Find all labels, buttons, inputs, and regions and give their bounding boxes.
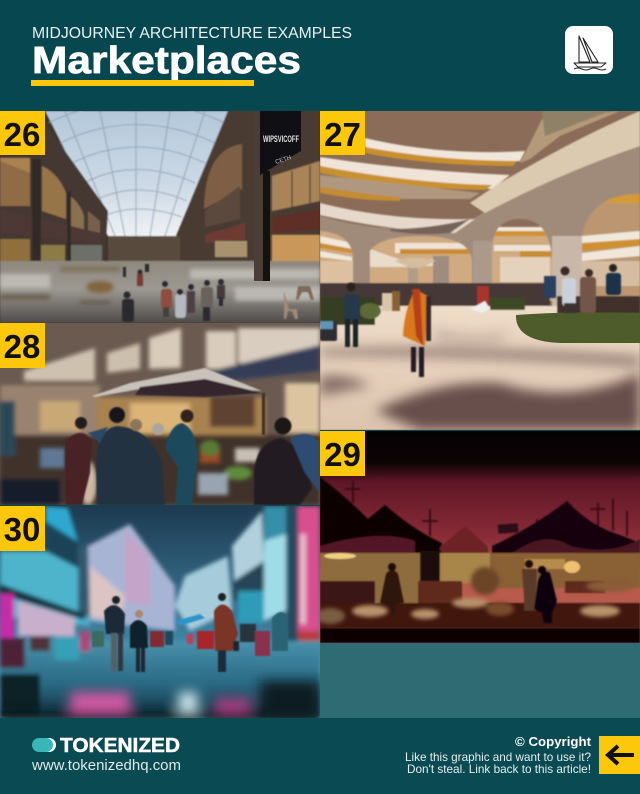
stall canopy [92, 368, 265, 435]
number badge 26 [0, 111, 45, 155]
header background [0, 0, 640, 111]
shoppers and bags [92, 593, 288, 672]
number badge 26: 26 [4, 116, 40, 153]
icon: Midjourney sailboat logo [565, 26, 613, 74]
people [320, 264, 621, 377]
upper levels [365, 138, 525, 162]
number badge 27: 27 [324, 116, 361, 153]
number badge 27 [320, 111, 365, 155]
image: marketplace 29, night bazaar [320, 431, 640, 643]
shoppers [65, 407, 320, 505]
header subtitle: MIDJOURNEY ARCHITECTURE EXAMPLES [32, 25, 352, 42]
produce [40, 440, 260, 505]
copyright note: Like this graphic and want to use it? [405, 750, 591, 764]
number badge 28: 28 [4, 328, 40, 365]
arch structure [320, 143, 640, 306]
image: marketplace 30, neon shopping street [0, 506, 320, 718]
sign: WIPSVICOFF [263, 134, 299, 144]
blurred foreground lights [0, 681, 320, 722]
copyright note: © Copyright [515, 734, 592, 749]
arrow box [599, 736, 640, 774]
number badge 28 [0, 323, 45, 368]
footer background [0, 718, 640, 794]
number badge 30: 30 [4, 511, 40, 548]
sign: CETH [275, 155, 292, 166]
image: marketplace 28, indoor food market [0, 323, 320, 505]
silhouettes [320, 560, 640, 643]
interior behind arches [320, 229, 640, 301]
empty teal panel [320, 642, 640, 718]
floor shadows [320, 331, 640, 430]
image: marketplace 27, curved concrete mall [320, 111, 640, 430]
title underline [31, 80, 254, 86]
copyright note: Don't steal. Link back to this article! [407, 762, 591, 776]
shoppers [122, 264, 314, 322]
copyright note [405, 734, 592, 776]
ground [320, 283, 550, 307]
footer brand logo: TOKENIZED [60, 735, 180, 757]
header title: Marketplaces [32, 40, 301, 82]
footer website: www.tokenizedhq.com [31, 757, 181, 774]
image: marketplace 26, glass arcade [0, 111, 320, 323]
number badge 29 [320, 431, 365, 476]
number badge 29: 29 [324, 436, 361, 473]
hedge [516, 312, 640, 343]
poles [345, 481, 627, 536]
number badge 30 [0, 506, 45, 551]
sign [254, 111, 301, 281]
